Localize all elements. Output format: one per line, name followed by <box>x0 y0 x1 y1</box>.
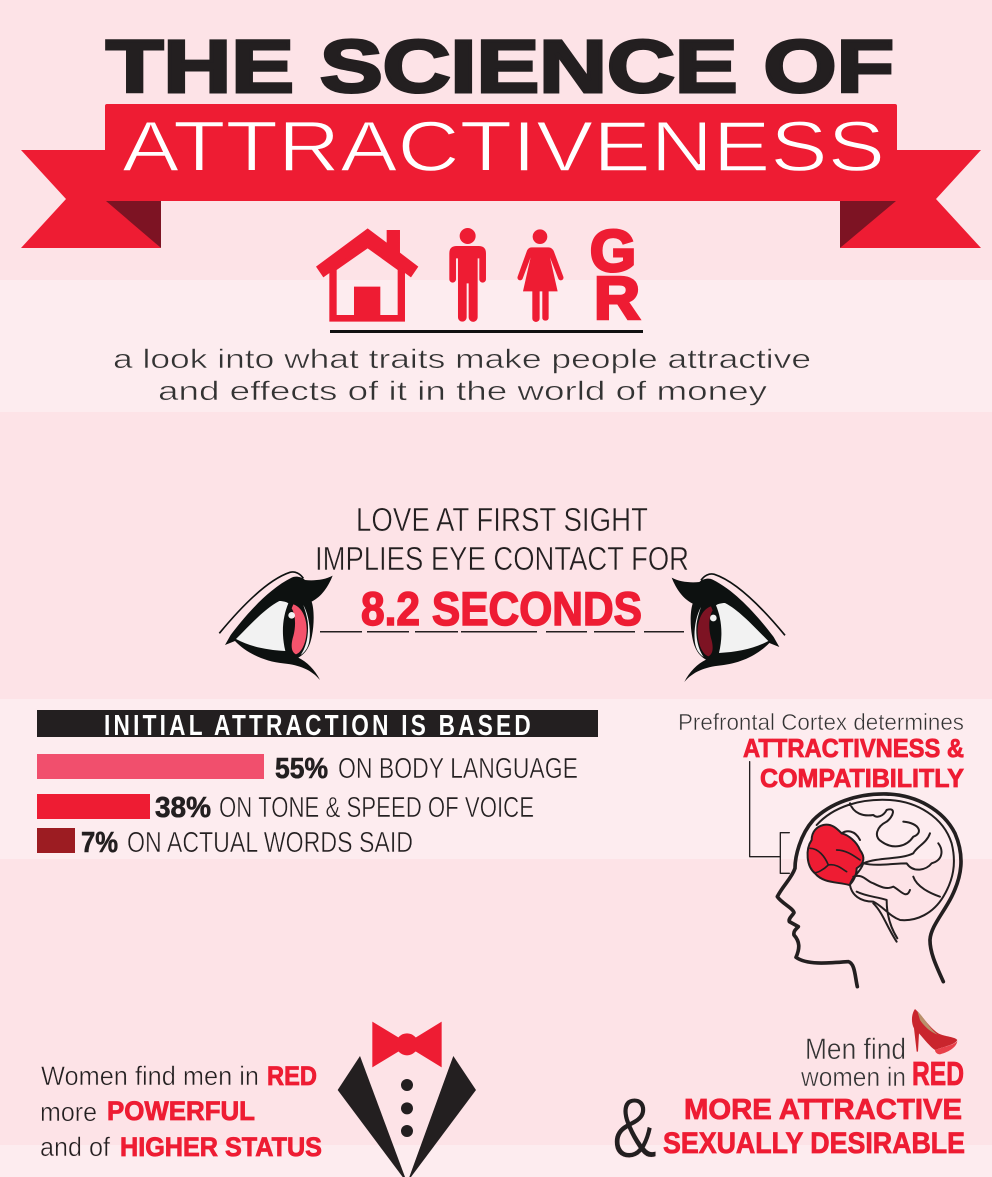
logo icons: home, man, woman, GR: R <box>594 265 640 332</box>
brain outline and folds <box>817 800 954 942</box>
subtitle <box>113 344 811 406</box>
men find women text <box>663 1033 965 1160</box>
women find men text: Women find men in <box>41 1061 259 1091</box>
prefrontal cortex text: COMPATIBILITLY <box>760 763 964 793</box>
icon: tuxedo <box>338 1022 476 1177</box>
women find men text: HIGHER STATUS <box>120 1132 322 1162</box>
bar: 7% actual words: ON ACTUAL WORDS SAID <box>127 827 413 859</box>
panel: initial attraction <box>37 708 598 859</box>
prefrontal cortex text: Prefrontal Cortex determines <box>678 709 964 735</box>
title: THE SCIENCE OF <box>106 25 894 108</box>
women find men text: POWERFUL <box>107 1096 255 1126</box>
bar: 55% body language: 55% <box>275 753 328 785</box>
red prefrontal region <box>808 825 863 885</box>
icon: woman <box>517 229 563 322</box>
men find women text: women in <box>800 1062 906 1092</box>
brain diagram <box>750 762 961 987</box>
bar: 38% tone and speed of voice <box>37 792 534 824</box>
prefrontal cortex text <box>678 709 964 793</box>
subtitle: and effects of it in the world of money <box>158 376 768 406</box>
prefrontal cortex text: ATTRACTIVNESS & <box>743 733 964 763</box>
ribbon banner <box>21 104 981 248</box>
love at first sight heading: IMPLIES EYE CONTACT FOR <box>315 540 689 577</box>
women find men text: RED <box>267 1061 317 1091</box>
GR letters: G <box>590 219 636 284</box>
icon: red high heel <box>912 1009 957 1054</box>
icon: left eye <box>219 572 333 680</box>
men find women text: RED <box>912 1055 964 1092</box>
subtitle: a look into what traits make people attractive <box>113 344 811 374</box>
dashed sight line <box>320 631 684 632</box>
love at first sight heading: LOVE AT FIRST SIGHT <box>356 501 648 538</box>
logo icons: home, man, woman, GR <box>316 219 640 332</box>
icon: house <box>316 228 418 322</box>
women find men text: more <box>40 1097 97 1127</box>
head outline <box>777 794 961 987</box>
icon: right eye <box>672 574 785 682</box>
women find men text: and of <box>40 1132 110 1162</box>
ribbon banner: ATTRACTIVENESS <box>122 108 885 187</box>
icon: man <box>449 228 486 322</box>
8.2 seconds stat: 8.2 SECONDS <box>361 582 642 635</box>
bar: 38% tone and speed of voice: ON TONE & SPEED OF VOICE <box>219 792 534 824</box>
men find women text: Men find <box>805 1033 906 1066</box>
bar: 7% actual words <box>37 827 413 859</box>
ampersand: & <box>612 1081 657 1176</box>
panel heading: INITIAL ATTRACTION IS BASED <box>104 708 531 742</box>
bar: 7% actual words: 7% <box>81 827 118 859</box>
bar: 38% tone and speed of voice: 38% <box>155 792 211 824</box>
love at first sight heading <box>315 501 689 577</box>
men find women text: MORE ATTRACTIVE <box>684 1094 962 1126</box>
bar: 55% body language: ON BODY LANGUAGE <box>338 753 578 785</box>
bracket callout line <box>750 762 789 873</box>
bar: 55% body language <box>37 753 578 785</box>
women find men text <box>40 1061 322 1162</box>
men find women text: SEXUALLY DESIRABLE <box>663 1127 965 1160</box>
